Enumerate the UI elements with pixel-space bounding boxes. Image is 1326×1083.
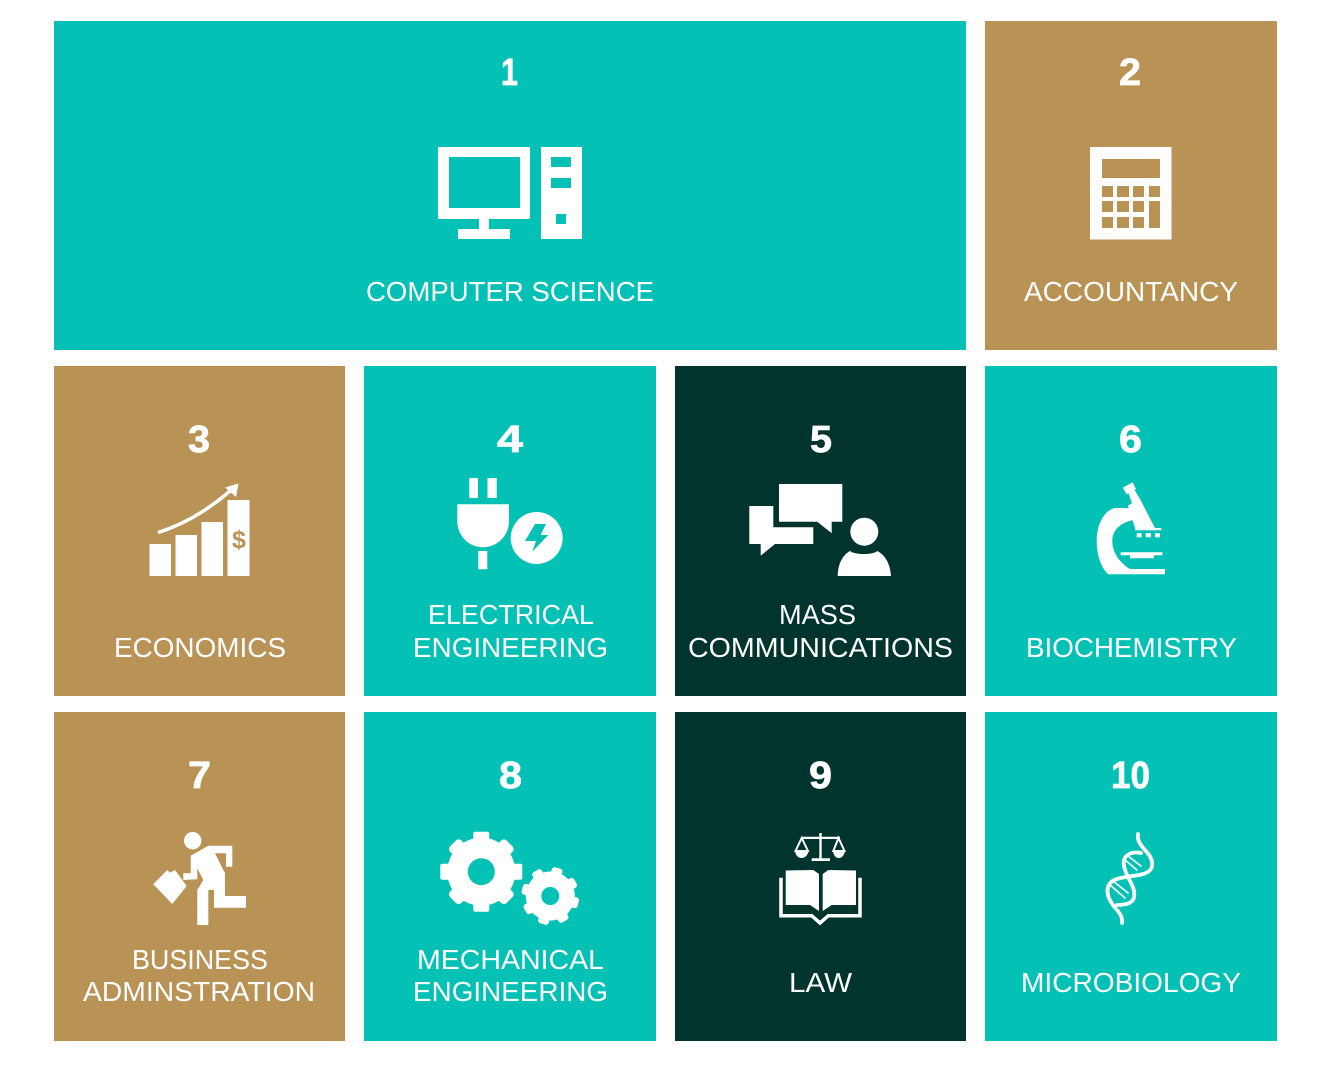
panel: biochemistry [985, 366, 1277, 696]
icon: DNA helix [1107, 834, 1152, 923]
panel: business administration: ADMINSTRATION [83, 976, 315, 1007]
label: MASS [779, 599, 856, 630]
label: ELECTRICAL [428, 599, 594, 630]
panel: electrical engineering [364, 366, 656, 696]
icon: microscope [1097, 482, 1165, 574]
panel: law [675, 712, 966, 1041]
rank number 7: 7 [188, 755, 211, 797]
rank number 3: 3 [188, 419, 210, 461]
icon: rising bar chart with arrow: $ [232, 526, 246, 554]
label: MICROBIOLOGY [1021, 967, 1241, 998]
panel: mechanical engineering [364, 712, 656, 1041]
rank number 9: 9 [809, 755, 832, 797]
rank number 8: 8 [499, 755, 522, 797]
rank number 1: 1 [501, 52, 518, 94]
label: MECHANICAL [417, 944, 604, 975]
panel: mass communications [675, 366, 966, 696]
icon: running person with briefcase [153, 832, 246, 925]
label: BIOCHEMISTRY [1026, 632, 1237, 663]
label: BUSINESS [132, 944, 268, 975]
rank number 2: 2 [1119, 52, 1141, 94]
label: ECONOMICS [114, 632, 286, 663]
panel: economics [54, 366, 345, 696]
icon: speech bubbles and person [749, 484, 891, 576]
panel: electrical engineering: ENGINEERING [413, 632, 608, 663]
panel: accountancy [985, 21, 1277, 350]
panel: business administration [54, 712, 345, 1041]
rank number 10: 10 [1111, 755, 1150, 797]
panel: computer science [54, 21, 966, 350]
label: COMPUTER SCIENCE [366, 276, 654, 307]
rank number 5: 5 [810, 419, 832, 461]
panel: mass communications: COMMUNICATIONS [688, 632, 953, 663]
panel: microbiology [985, 712, 1277, 1041]
label: LAW [789, 967, 853, 998]
panel: mechanical engineering: ENGINEERING [413, 976, 608, 1007]
label: ACCOUNTANCY [1024, 276, 1238, 307]
icon: scales and open book [781, 833, 860, 923]
icon: two gears [440, 832, 580, 925]
rank number 6: 6 [1119, 419, 1142, 461]
icon: rising bar chart with arrow [150, 484, 250, 576]
icon: calculator [1090, 147, 1172, 240]
icon: plug with lightning bolt [457, 478, 563, 569]
rank number 4: 4 [497, 419, 523, 461]
icon: desktop computer [438, 147, 582, 239]
